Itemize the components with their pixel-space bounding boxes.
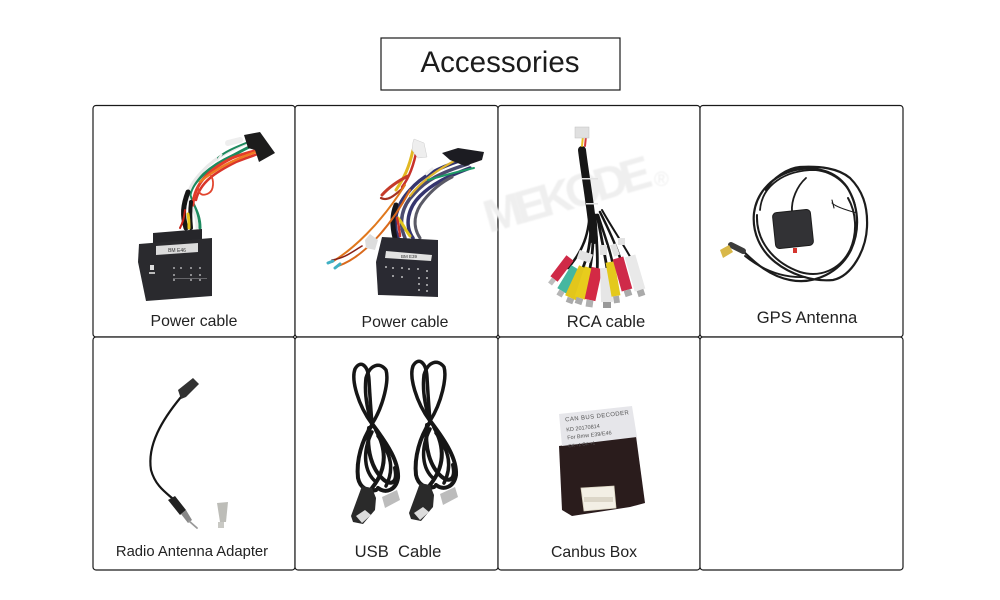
icon: power cable harness with branch wires: BM E39 xyxy=(401,254,417,259)
panel: USB cable xyxy=(295,337,498,570)
icon: GPS antenna with coiled cable xyxy=(720,167,867,281)
title box xyxy=(381,38,620,90)
panel: canbus box xyxy=(498,337,700,570)
icon: USB cable right xyxy=(409,361,458,521)
panel: empty cell xyxy=(700,337,903,570)
label: power cable: Power cable xyxy=(362,314,449,331)
panel: GPS antenna xyxy=(700,106,903,337)
icon: RCA cable bundle xyxy=(550,127,642,308)
icon: canbus decoder box: CAN BUS DECODER xyxy=(565,410,630,424)
icon: two USB cables xyxy=(351,361,458,524)
watermark: MEKODE: MEKODE xyxy=(477,145,657,243)
icon: canbus decoder box: OK +1 OK +1 xyxy=(568,440,596,448)
icon: radio antenna adapter xyxy=(150,378,228,528)
icon: power cable wiring harness with square connector xyxy=(138,132,275,301)
icon: canbus decoder box: For Bmw E39/E46 xyxy=(567,430,612,441)
label: USB Cable: USB Cable xyxy=(355,542,441,561)
label: GPS Antenna: GPS Antenna xyxy=(757,308,858,327)
panel: RCA cable xyxy=(477,106,700,337)
label: RCA cable: RCA cable xyxy=(567,312,645,331)
title box: Accessories xyxy=(420,46,580,79)
label: Radio Antenna Adapter: Radio Antenna Adapter xyxy=(116,544,268,560)
label: power cable: Power cable xyxy=(151,313,238,330)
panel: radio antenna adapter xyxy=(93,337,295,570)
icon: power cable harness with branch wires xyxy=(328,139,484,297)
icon: USB cable left xyxy=(351,364,400,524)
panel: power cable 1 xyxy=(93,106,295,337)
icon: canbus decoder box xyxy=(559,406,645,516)
icon: canbus decoder box: KD 20170814 xyxy=(566,424,600,433)
watermark: MEKODE: ® xyxy=(654,169,669,191)
icon: power cable wiring harness with square connector: BM E46 xyxy=(168,248,186,254)
label: Canbus Box: Canbus Box xyxy=(551,544,637,561)
panel: power cable 2 xyxy=(295,106,498,337)
